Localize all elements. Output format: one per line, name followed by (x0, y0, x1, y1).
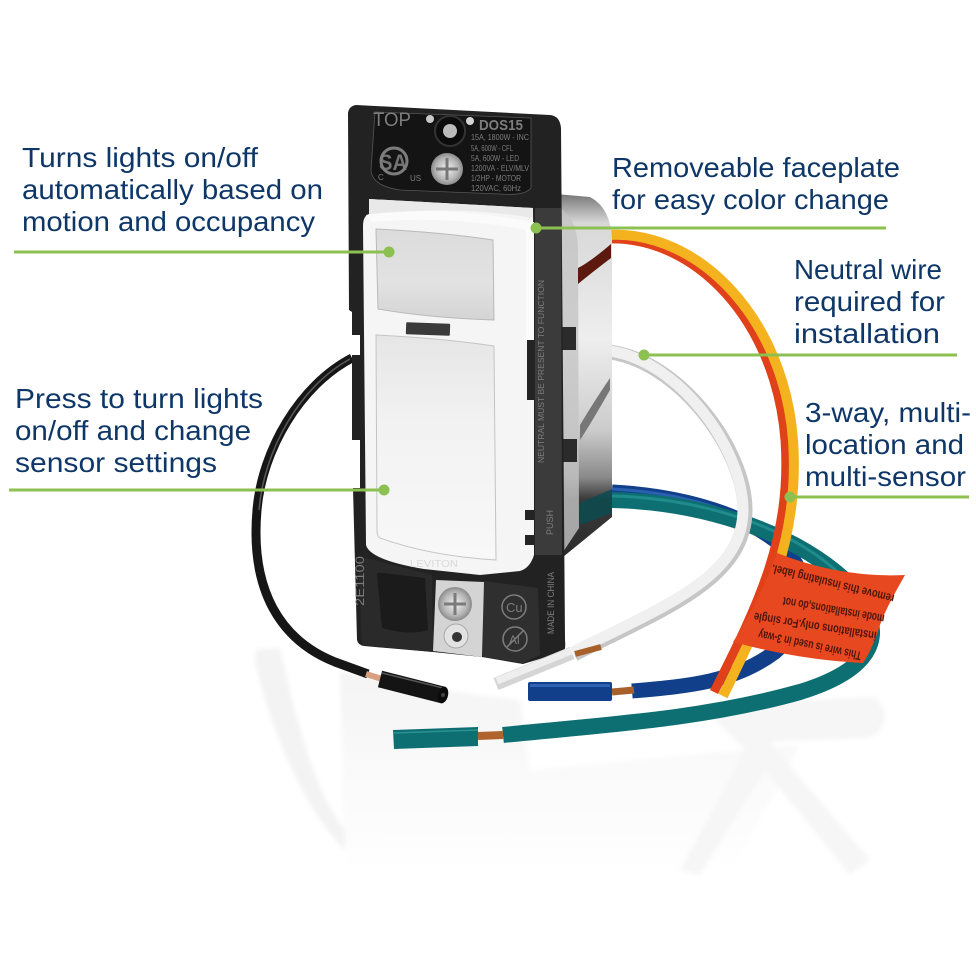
strap printed marks: 1/2HP - MOTOR (471, 174, 521, 183)
callout: three-way wiring (784, 397, 971, 502)
callout text: Neutral wire (794, 254, 942, 285)
warning label on traveler wire: This wire is used in 3-way (757, 627, 863, 663)
strap printed marks: PUSH (545, 510, 555, 535)
strap printed marks: 15A, 1800W - INC (471, 133, 529, 142)
callout text: motion and occupancy (22, 206, 315, 237)
strap printed marks: Al (509, 633, 520, 647)
wire: red and yellow three-way traveler (608, 235, 794, 696)
callout text: on/off and change (15, 415, 251, 446)
white wire stripped end (496, 647, 601, 684)
blue wire stripped end (528, 682, 634, 701)
strap printed marks: DOS15 (479, 117, 523, 134)
callout text: required for (794, 286, 945, 317)
strap printed marks: TOP (373, 110, 411, 131)
callout text: multi-sensor (805, 461, 966, 492)
strap printed marks: 1200VA - ELV/MLV (471, 164, 530, 173)
black mounting strap (348, 105, 565, 664)
callout text: Press to turn lights (15, 383, 263, 414)
push button (376, 335, 496, 560)
callout: neutral wire (638, 254, 957, 360)
strap printed marks: MADE IN CHINA (546, 572, 556, 634)
bottom metal strap with ground screw (433, 580, 484, 657)
strap printed marks: 120VAC, 60Hz (471, 184, 521, 193)
callout text: for easy color change (612, 184, 889, 215)
wire: black (256, 358, 368, 674)
strap printed marks: Cu (506, 600, 523, 615)
removable faceplate (363, 199, 535, 575)
strap printed marks: NEUTRAL MUST BE PRESENT TO FUNCTION (537, 280, 546, 463)
callout: push button (9, 383, 390, 496)
top mounting screw and hole (426, 115, 474, 185)
status LED window (406, 322, 450, 336)
wire: white (573, 351, 745, 654)
strap printed marks: C (378, 173, 384, 182)
strap printed marks: SA (379, 150, 407, 175)
warning label on traveler wire (733, 553, 905, 663)
warning label on traveler wire: mode installations,do not (781, 594, 886, 626)
callout: motion sensing (14, 142, 394, 258)
wire: blue (behind) (612, 489, 805, 691)
teal wire stripped end (393, 727, 503, 749)
strap printed marks: 5A, 600W - LED (471, 154, 519, 163)
callout text: Removeable faceplate (612, 152, 900, 183)
strap printed marks: US (410, 174, 421, 183)
callout text: sensor settings (15, 447, 217, 478)
strap printed marks: 5A, 600W - CFL (471, 144, 513, 153)
callout text: automatically based on (22, 174, 323, 205)
callout text: installation (794, 318, 940, 349)
callout text: 3-way, multi- (805, 397, 971, 428)
occupancy sensor lens (376, 229, 494, 320)
callout text: location and (805, 429, 964, 460)
callout: removable faceplate (530, 152, 900, 234)
wire: teal (503, 496, 872, 735)
floor reflection (255, 648, 885, 880)
warning label on traveler wire: remove this insulating label. (770, 562, 896, 606)
callout text: Turns lights on/off (22, 142, 258, 173)
side housing (546, 194, 612, 557)
strap printed marks (353, 110, 556, 651)
black wire stripped end (366, 673, 450, 704)
removable faceplate: LEVITON (410, 559, 458, 570)
warning label on traveler wire: installations only.For single (753, 610, 877, 643)
strap printed marks: 2E1100 (353, 556, 367, 606)
